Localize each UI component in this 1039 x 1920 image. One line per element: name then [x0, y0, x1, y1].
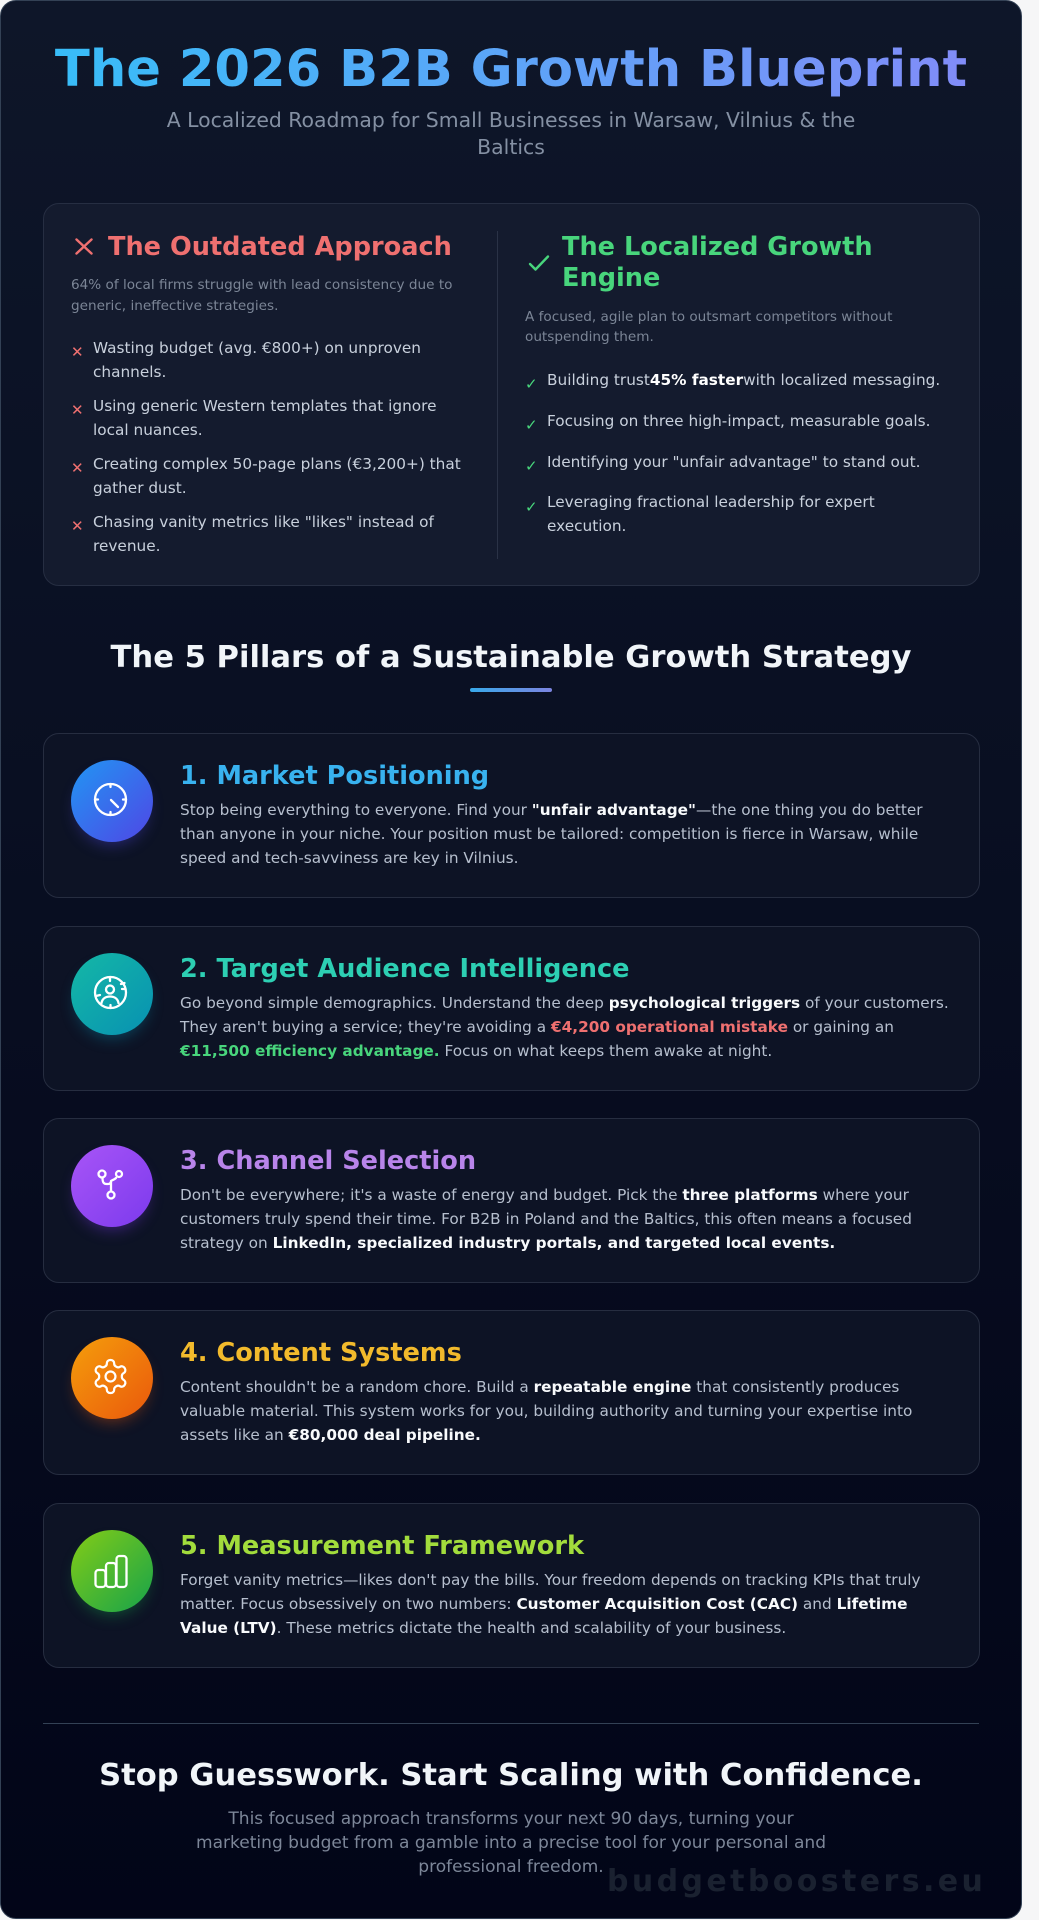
icon: gauge	[71, 760, 153, 842]
marker: ✕	[71, 401, 84, 419]
list: localized engine items: execution.	[547, 517, 626, 535]
text	[180, 994, 949, 1060]
footer heading: Stop Guesswork. Start Scaling with Confidence.	[99, 1758, 923, 1793]
text: Go beyond simple demographics. Understand the deep psychological triggers of your customers.	[180, 994, 949, 1012]
panel: pillar 1	[43, 733, 980, 898]
heading: 2. Target Audience Intelligence	[180, 954, 630, 984]
footer text: marketing budget from a gamble into a precise tool for your personal and	[196, 1833, 826, 1853]
list: outdated approach items: channels.	[93, 363, 166, 381]
text	[180, 1186, 912, 1252]
footer text: professional freedom.	[418, 1857, 604, 1877]
heading underline	[470, 688, 552, 692]
text: localized description: outspending them.	[525, 329, 654, 345]
text: assets like an €80,000 deal pipeline.	[180, 1426, 481, 1444]
marker: ✕	[71, 516, 84, 534]
text	[180, 801, 923, 867]
text: They aren't buying a service; they're avoiding a €4,200 operational mistake or gaining an	[180, 1018, 894, 1036]
list: outdated approach items: gather dust.	[93, 479, 187, 497]
text: matter. Focus obsessively on two numbers: Customer Acquisition Cost (CAC) and Lifetime	[180, 1595, 907, 1613]
marker: ✓	[525, 416, 538, 434]
icon: green check	[528, 255, 550, 271]
marker: ✓	[525, 457, 538, 475]
marker: ✓	[525, 375, 538, 393]
heading: localized growth engine	[562, 232, 873, 293]
text: Don't be everywhere; it's a waste of energy and budget. Pick the three platforms where your	[180, 1186, 909, 1204]
marker: ✕	[71, 343, 84, 361]
section heading: The 5 Pillars of a Sustainable Growth Strategy	[111, 640, 911, 674]
heading: 4. Content Systems	[180, 1338, 462, 1368]
text: Content shouldn't be a random chore. Build a repeatable engine that consistently produces	[180, 1378, 899, 1396]
subtitle	[167, 108, 855, 159]
list: outdated approach items: Creating complex 50-page plans (€3,200+) that	[93, 455, 461, 473]
list: outdated approach items: Wasting budget (avg. €800+) on unproven	[93, 339, 421, 357]
text	[180, 1571, 921, 1637]
footer text	[196, 1809, 826, 1877]
list: outdated approach items: local nuances.	[93, 421, 203, 439]
text: speed and tech-savviness are key in Vilnius.	[180, 849, 519, 867]
panel: pillar 2	[43, 926, 980, 1091]
marker: ✕	[71, 459, 84, 477]
text: Forget vanity metrics—likes don't pay the bills. Your freedom depends on tracking KPIs that truly	[180, 1571, 921, 1589]
text: localized description	[525, 308, 892, 345]
text	[180, 1378, 912, 1444]
list: outdated approach items	[71, 339, 461, 555]
panel: pillar 4	[43, 1310, 980, 1475]
marker: ✓	[525, 498, 538, 516]
text: localized description: A focused, agile plan to outsmart competitors without	[525, 308, 892, 324]
text: strategy on LinkedIn, specialized industry portals, and targeted local events.	[180, 1234, 835, 1252]
heading: 1. Market Positioning	[180, 761, 489, 791]
panel: comparison	[43, 203, 980, 586]
text: valuable material. This system works for you, building authority and turning your expertise into	[180, 1402, 912, 1420]
list: localized engine items: Focusing on three high-impact, measurable goals.	[547, 412, 930, 430]
list: outdated approach items: revenue.	[93, 537, 160, 555]
icon: gear	[71, 1337, 153, 1419]
text: customers truly spend their time. For B2B in Poland and the Baltics, this often means a focused	[180, 1210, 912, 1228]
list: outdated approach items: Using generic Western templates that ignore	[93, 397, 437, 415]
subtitle: Baltics	[477, 135, 545, 159]
text: Stop being everything to everyone. Find your "unfair advantage"—the one thing you do better	[180, 801, 923, 819]
heading: outdated approach: The Outdated Approach	[108, 232, 452, 262]
list: outdated approach items: Chasing vanity metrics like "likes" instead of	[93, 513, 434, 531]
icon: bar chart	[71, 1530, 153, 1612]
list: localized engine items: Building trust45% fasterwith localized messaging.	[547, 371, 940, 389]
title: The 2026 B2B Growth Blueprint	[55, 39, 967, 99]
heading: 5. Measurement Framework	[180, 1531, 584, 1561]
text: than anyone in your niche. Your position must be tailored: competition is fierce in Warsaw, while	[180, 825, 918, 843]
panel: pillar 5	[43, 1503, 980, 1668]
text: €11,500 efficiency advantage. Focus on what keeps them awake at night.	[180, 1042, 772, 1060]
list: localized engine items	[525, 371, 940, 535]
heading: 3. Channel Selection	[180, 1146, 476, 1176]
text: outdated description	[71, 277, 453, 314]
text: outdated description: 64% of local firms struggle with lead consistency due to	[71, 277, 453, 293]
list: localized engine items: Leveraging fractional leadership for expert	[547, 493, 875, 511]
subtitle: A Localized Roadmap for Small Businesses in Warsaw, Vilnius & the	[167, 108, 855, 132]
icon: audience	[71, 953, 153, 1035]
text: outdated description: generic, ineffective strategies.	[71, 298, 278, 314]
heading: localized growth engine: Engine	[562, 263, 660, 293]
text: Value (LTV). These metrics dictate the health and scalability of your business.	[180, 1619, 786, 1637]
panel: pillar 3	[43, 1118, 980, 1282]
heading: localized growth engine: The Localized Growth	[562, 232, 873, 262]
icon: red cross	[75, 238, 93, 255]
list: localized engine items: Identifying your "unfair advantage" to stand out.	[547, 452, 920, 470]
watermark: budgetboosters.eu	[607, 1864, 986, 1899]
footer text: This focused approach transforms your next 90 days, turning your	[228, 1809, 794, 1829]
icon: fork	[71, 1144, 153, 1226]
